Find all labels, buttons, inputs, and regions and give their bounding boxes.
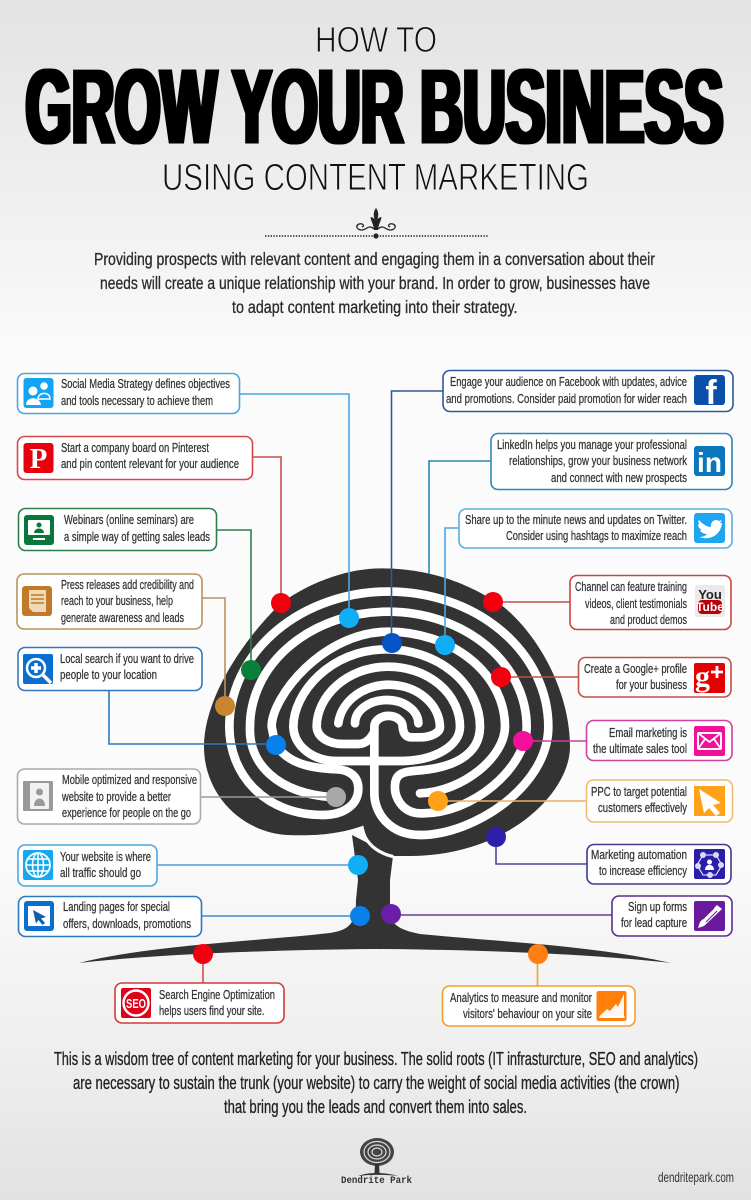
panel: mobile optimized: Mobile optimized and responsive [62,773,197,787]
tree: labyrinth crown [204,568,570,857]
panel: email marketing [586,720,732,760]
panel: google plus: for your business [616,678,687,692]
panel: marketing automation [587,844,731,884]
panel: local search: Local search if you want to drive [60,652,194,666]
panel: landing pages [18,896,202,936]
icon: document [22,586,52,616]
panel: youtube: and product demos [610,613,687,627]
icon: magnifier [23,654,53,684]
panel: website: Your website is where [60,850,151,864]
icon: pinterest: P [30,443,47,475]
panel: local search [18,648,202,690]
panel: webinars: Webinars (online seminars) are [64,513,194,527]
panel: ppc: customers effectively [598,801,688,815]
ornament divider [265,208,489,239]
panel: pinterest: Start a company board on Pinterest [61,441,209,455]
panel: twitter [459,509,732,548]
panel: sign up forms: Sign up forms [628,900,687,914]
icon: facebook: f [705,374,717,412]
logo: dendrite park: Dendrite Park [341,1175,412,1187]
connector: landing pages [202,915,360,917]
panel: seo: helps users find your site. [159,1004,264,1018]
panel: press releases: reach to your business, help [61,594,173,608]
panel: youtube [570,576,731,630]
connector: facebook [392,391,443,643]
icon: google plus: g [695,660,710,693]
panel: marketing automation: Marketing automation [591,848,687,862]
icon: youtube: Tube [696,600,724,614]
connector: google plus [501,676,578,678]
panel: seo [115,983,284,1023]
panel: analytics [442,986,635,1026]
title line: using content marketing: USING CONTENT MARKETING [162,157,589,199]
panel: social media strategy: Social Media Strategy defines objectives [61,377,230,391]
panel: webinars: a simple way of getting sales leads [64,530,210,544]
title line: how to: HOW TO [315,19,437,60]
panel: seo: Search Engine Optimization [159,988,275,1002]
icon: phone [23,781,53,811]
panel: sign up forms [612,896,732,936]
panel: mobile optimized [18,769,200,824]
panel: marketing automation: to increase efficiency [599,864,688,878]
connector: ppc [438,800,586,802]
panel: email marketing: Email marketing is [609,726,687,740]
closing paragraph: that bring you the leads and convert them into sales. [224,1097,527,1117]
panel: ppc: PPC to target potential [591,785,687,799]
connector: website [157,864,358,866]
panel: website: all traffic should go [60,866,141,880]
connector: youtube [493,601,570,603]
panel: social media strategy: and tools necessary to achieve them [61,394,213,408]
icon: globe [23,850,53,880]
panel: sign up forms: for lead capture [621,916,687,930]
connector lines [109,391,612,986]
title [26,19,724,199]
icon: pinterest [24,443,54,475]
panel: facebook [443,370,733,412]
panel: pinterest: and pin content relevant for your audience [61,457,239,471]
panel: google plus: Create a Google+ profile [584,662,687,676]
panel: local search: people to your location [60,668,157,682]
icon: youtube [695,585,725,617]
connector: social media [240,394,349,618]
icon: linkedin: in [697,447,722,478]
panel: youtube: Channel can feature training [575,580,687,594]
icon: seo badge: SEO [126,996,146,1011]
panel: mobile optimized: website to provide a better [61,790,171,804]
panel: webinars [18,508,216,550]
icon: browser cursor [24,901,54,931]
panel: twitter: Consider using hashtags to maximize reach [506,529,687,543]
connector: email [523,740,586,742]
intro text: to adapt content marketing into their strategy. [232,297,518,317]
panel: press releases [17,574,202,629]
connector: mobile [201,796,336,798]
connector: linkedin [429,461,491,574]
closing paragraph [54,1049,698,1117]
connector: sign up forms [391,914,612,916]
icon: twitter bird [694,513,725,543]
panel: linkedin: LinkedIn helps you manage your professional [497,438,687,452]
icon: webinar monitor [24,515,54,545]
panel: linkedin: and connect with new prospects [551,471,687,485]
icon: network [694,849,725,879]
panel: website [18,845,157,886]
panel: landing pages: Landing pages for special [63,900,170,914]
icon: chart [596,991,626,1021]
panel: analytics: Analytics to measure and monitor [450,991,592,1005]
panel: google plus [578,658,731,697]
logo: dendrite park [341,1138,412,1187]
connector: analytics [536,954,538,986]
icon: facebook [694,374,725,412]
panel: press releases: generate awareness and leads [61,611,184,625]
panel: twitter: Share up to the minute news and updates on Twitter. [465,513,687,527]
panel: mobile optimized: experience for people on the go [62,806,191,820]
connection dots on tree [193,592,548,964]
panel: ppc [586,780,732,822]
panel: analytics: visitors' behaviour on your site [463,1007,592,1021]
panel: landing pages: offers, downloads, promotions [63,917,191,931]
icon: social people [24,378,54,408]
panel: email marketing: the ultimate sales tool [593,742,687,756]
connector: twitter [445,528,459,645]
tree: trunk and roots [79,835,671,963]
panel: press releases: Press releases add credibility and [61,578,194,592]
connector: marketing automation [496,837,587,864]
connector: local search [109,691,276,744]
icon: arrow cursor [694,786,725,816]
panel: social media strategy [18,374,240,414]
panel: youtube: videos, client testimonials [585,597,687,611]
panel: linkedin [491,434,732,490]
connector: press releases [202,598,225,706]
connector: pinterest [253,457,281,603]
connector: seo [202,954,204,983]
icon: google plus [694,660,725,693]
icon: youtube: You [698,587,722,602]
intro text [94,249,655,317]
panel: pinterest [18,436,252,480]
icon: seo badge [121,988,151,1018]
icon: pencil [694,901,725,931]
panel: linkedin: relationships, grow your business network [509,454,688,468]
icon: envelope [694,726,725,756]
connector: webinars [217,530,251,670]
